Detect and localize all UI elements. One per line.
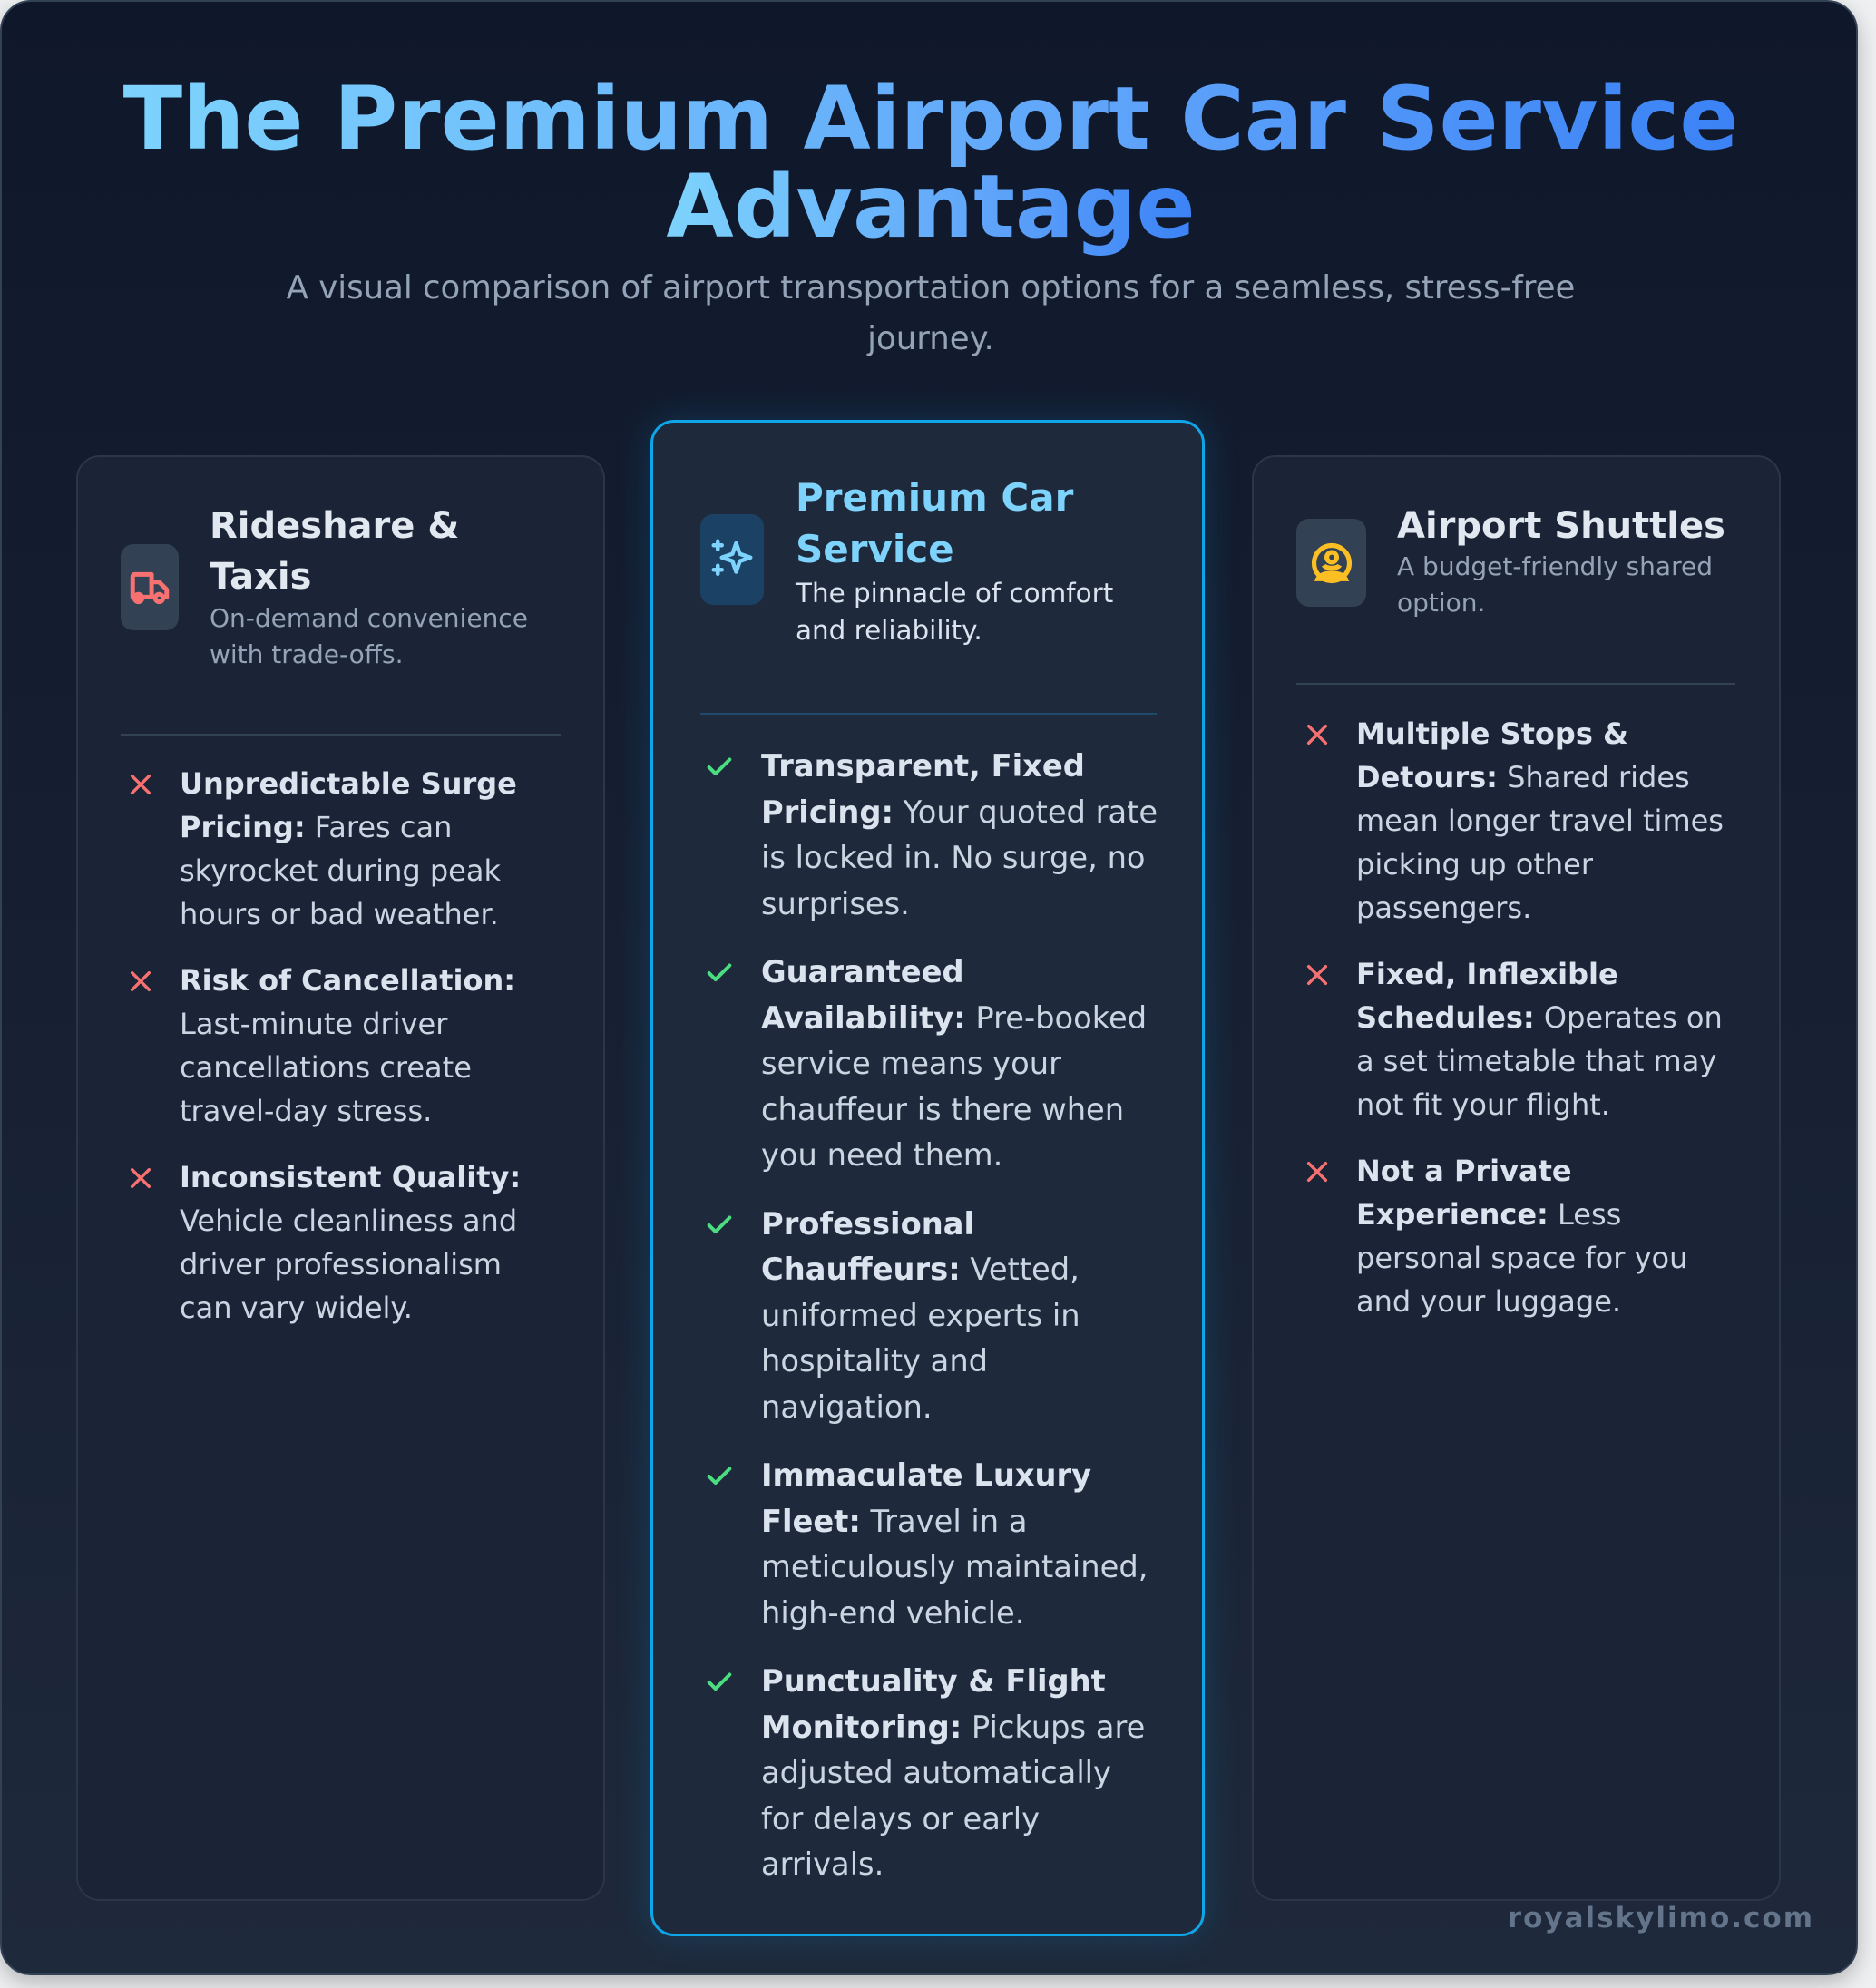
list: drawbacks (1306, 716, 1724, 1319)
subheading: option. (1397, 588, 1485, 618)
item: quality: Inconsistent Quality: (180, 1160, 521, 1194)
item: availability: service means your (761, 1046, 1061, 1081)
title: The Premium Airport Car Service (123, 68, 1738, 170)
icon: shuttle (1296, 519, 1366, 607)
item: fixed pricing: Transparent, Fixed (761, 748, 1085, 784)
heading: Rideshare & (210, 505, 459, 547)
item: fleet (708, 1457, 1148, 1631)
item: availability: you need them. (761, 1137, 1002, 1173)
item: punctuality: Punctuality & Flight (761, 1663, 1106, 1699)
item: surge pricing: Unpredictable Surge (180, 766, 517, 801)
item: stops: Detours: Shared rides (1356, 760, 1690, 794)
list: drawbacks (131, 766, 521, 1325)
heading: Premium Car (796, 475, 1073, 520)
panel: premium car service (650, 420, 1205, 1936)
heading (210, 505, 459, 598)
item: punctuality (708, 1663, 1145, 1882)
item: fixed pricing: is locked in. No surge, no (761, 840, 1146, 875)
item: schedules: not fit your flight. (1356, 1087, 1610, 1122)
item: fleet: meticulously maintained, (761, 1549, 1148, 1584)
item: fleet: Fleet: Travel in a (761, 1504, 1027, 1538)
heading: Airport Shuttles (1397, 505, 1725, 547)
heading (796, 475, 1074, 571)
item: private: Experience: Less (1356, 1197, 1621, 1232)
title (123, 68, 1738, 258)
item: fleet: Immaculate Luxury (761, 1457, 1091, 1493)
subheading: A budget-friendly shared (1397, 551, 1713, 581)
item: stops: mean longer travel times (1356, 804, 1724, 838)
item: availability: Availability: Pre-booked (761, 999, 1147, 1036)
item: cancellation: Risk of Cancellation: (180, 963, 515, 998)
item: punctuality: adjusted automatically (761, 1755, 1111, 1790)
item: private: and your luggage. (1356, 1284, 1621, 1319)
item: fixed pricing: Pricing: Your quoted rate (761, 794, 1158, 829)
item: stops (1306, 716, 1724, 925)
item: fixed pricing: surprises. (761, 885, 910, 921)
icon: sparkles (700, 514, 764, 605)
item: surge pricing (131, 766, 517, 931)
item: stops: Multiple Stops & (1356, 716, 1628, 751)
item: chauffeurs: uniformed experts in (761, 1297, 1080, 1333)
panel: rideshare & taxis (76, 455, 605, 1901)
item: cancellation: Last-minute driver (180, 1007, 447, 1041)
item: private (1306, 1154, 1687, 1319)
list: benefits (708, 748, 1158, 1882)
item: availability (708, 954, 1147, 1173)
item: chauffeurs: hospitality and (761, 1343, 988, 1379)
item: private: personal space for you (1356, 1241, 1687, 1275)
subheading: On-demand convenience (210, 603, 528, 633)
watermark: royalskylimo.com (1508, 1902, 1814, 1934)
item: stops: picking up other (1356, 847, 1593, 882)
subheading (1397, 551, 1713, 618)
item: punctuality: for delays or early (761, 1801, 1040, 1836)
item: quality (131, 1160, 521, 1325)
item: schedules: a set timetable that may (1356, 1044, 1716, 1078)
item: fleet: high-end vehicle. (761, 1594, 1024, 1631)
subheading (795, 578, 1113, 646)
subheading (210, 603, 528, 669)
item: cancellation (131, 963, 515, 1128)
item: availability: Guaranteed (761, 954, 964, 989)
item: quality: Vehicle cleanliness and (180, 1204, 517, 1238)
panel: airport shuttles (1252, 455, 1781, 1901)
subtitle: A visual comparison of airport transportation options for a seamless, stress-free journey. (287, 269, 1575, 357)
subheading: with trade-offs. (210, 639, 403, 669)
item: chauffeurs: navigation. (761, 1389, 933, 1424)
heading: Taxis (210, 556, 311, 598)
item: stops: passengers. (1356, 891, 1531, 925)
item: fixed pricing (708, 748, 1158, 921)
item: punctuality: Monitoring: Pickups are (761, 1709, 1145, 1745)
item: quality: driver professionalism (180, 1247, 502, 1281)
item: cancellation: travel-day stress. (180, 1094, 432, 1128)
icon: truck (121, 544, 179, 630)
item: quality: can vary widely. (180, 1291, 413, 1325)
title: Advantage (666, 156, 1196, 258)
item: private: Not a Private (1356, 1154, 1572, 1188)
item: availability: chauffeur is there when (761, 1092, 1124, 1126)
item: cancellation: cancellations create (180, 1050, 472, 1085)
subheading: and reliability. (796, 615, 982, 646)
item: schedules: Schedules: Operates on (1356, 1000, 1723, 1035)
item: surge pricing: Pricing: Fares can (180, 810, 452, 844)
item: surge pricing: hours or bad weather. (180, 897, 499, 931)
item: chauffeurs: Chauffeurs: Vetted, (761, 1252, 1080, 1287)
subheading: The pinnacle of comfort (796, 578, 1113, 609)
heading: Service (796, 527, 954, 571)
item: chauffeurs (708, 1206, 1080, 1424)
item: schedules (1306, 957, 1723, 1122)
item: schedules: Fixed, Inflexible (1356, 957, 1618, 991)
item: surge pricing: skyrocket during peak (180, 853, 501, 888)
item: punctuality: arrivals. (761, 1847, 884, 1882)
item: chauffeurs: Professional (761, 1206, 974, 1241)
